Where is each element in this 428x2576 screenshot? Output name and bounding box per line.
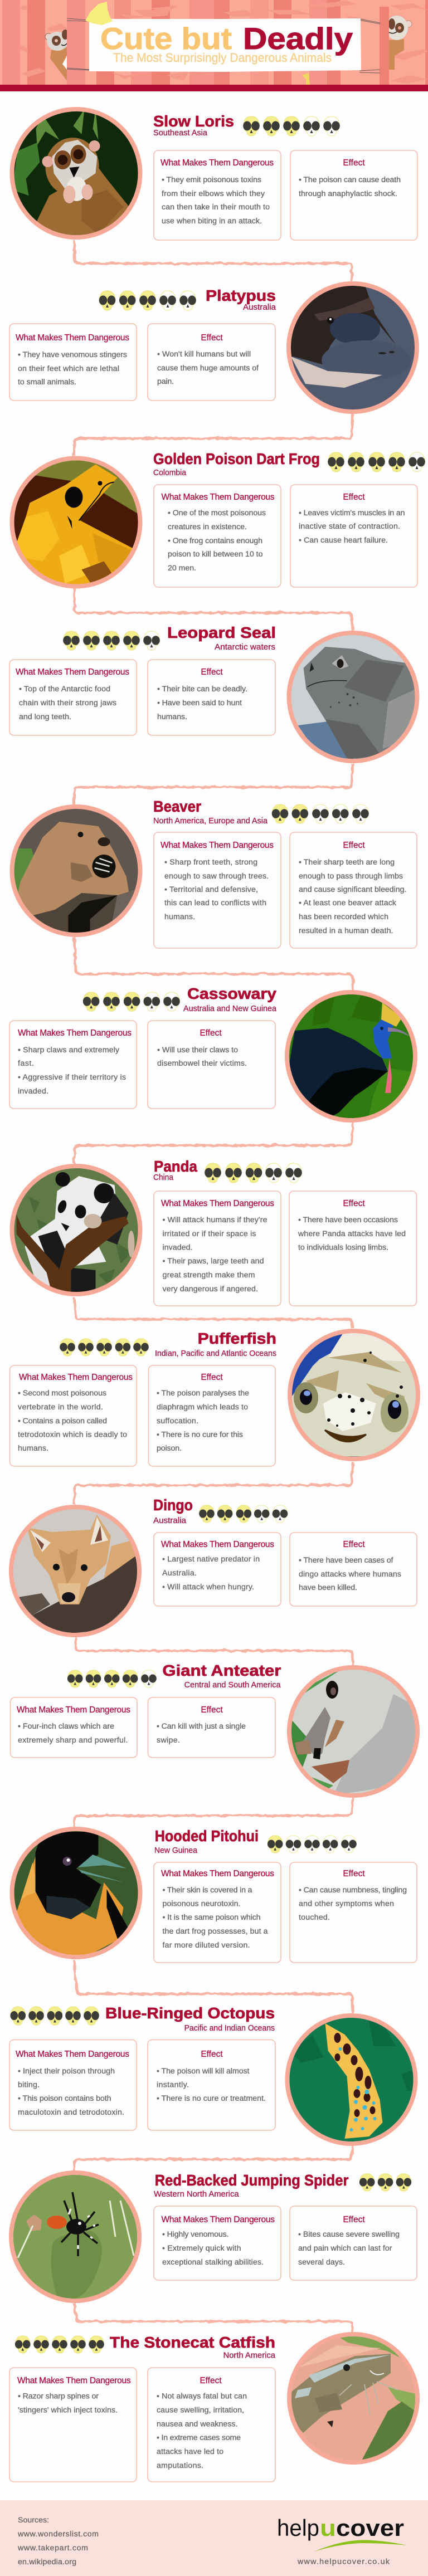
- card: what makes them dangerous: can then take in their mouth to: [162, 203, 270, 212]
- card: effect: has been recorded which: [299, 913, 388, 921]
- panel: golden poison dart frog: [9, 450, 425, 589]
- card: what makes them dangerous: What Makes Them Dangerous: [16, 333, 129, 343]
- card: effect: • Leaves victim's muscles in an: [299, 509, 405, 518]
- card: what makes them dangerous: • Extremely quick with: [162, 2244, 241, 2253]
- card: what makes them dangerous: • Second most poisonous: [18, 1389, 106, 1398]
- heading: Golden Poison Dart Frog: [153, 450, 320, 467]
- connector: seal to beaver: [74, 763, 353, 804]
- card: what makes them dangerous: What Makes Them Dangerous: [161, 1869, 274, 1879]
- danger rating: 3 of 5 skulls: [99, 291, 196, 310]
- card: what makes them dangerous: • Highly venomous.: [162, 2230, 228, 2239]
- card: what makes them dangerous: • Sharp front teeth, strong: [164, 858, 257, 867]
- card: what makes them dangerous: [9, 2368, 137, 2482]
- illustration: dingo: [8, 1504, 142, 1638]
- card: what makes them dangerous: [9, 660, 137, 735]
- card: what makes them dangerous: • Razor sharp spines or: [18, 2392, 99, 2401]
- location: Western North America: [154, 2190, 240, 2199]
- illustration: leopard seal: [286, 630, 420, 764]
- card: what makes them dangerous: this can lead to conflicts with: [164, 899, 266, 908]
- illustration: giant anteater: [286, 1665, 421, 1798]
- connector: panda to pufferfish: [74, 1297, 353, 1329]
- card: what makes them dangerous: • Inject their poison through: [18, 2067, 115, 2076]
- location: Australia: [153, 1516, 187, 1525]
- connector: loris to platypus: [74, 240, 352, 281]
- card: what makes them dangerous: [154, 832, 281, 948]
- card: effect: Effect: [200, 2376, 222, 2385]
- connector: cassowary to panda: [74, 1123, 353, 1164]
- card: what makes them dangerous: very dangerous if angered.: [163, 1285, 258, 1294]
- card: effect: [290, 485, 417, 587]
- card: effect: cause swelling, irritation,: [157, 2406, 244, 2414]
- sources: Sources:: [18, 2516, 49, 2525]
- card: effect: cause them huge amounts of: [157, 364, 259, 373]
- danger rating: 3 of 5 skulls: [83, 992, 180, 1011]
- card: what makes them dangerous: What Makes Them Dangerous: [16, 2050, 129, 2059]
- card: what makes them dangerous: • They emit poisonous toxins: [162, 175, 261, 184]
- location: China: [153, 1173, 174, 1182]
- card: effect: and cause significant bleeding.: [299, 885, 407, 894]
- card: effect: instantly.: [157, 2080, 189, 2089]
- card: effect: Effect: [343, 158, 365, 168]
- card: what makes them dangerous: [9, 1021, 137, 1109]
- card: what makes them dangerous: • Their paws, large teeth and: [163, 1257, 264, 1266]
- card: effect: Effect: [201, 667, 223, 677]
- card: what makes them dangerous: from their elbows which they: [162, 189, 265, 198]
- connector: octopus to spider: [74, 2146, 353, 2170]
- card: what makes them dangerous: What Makes Them Dangerous: [162, 492, 275, 502]
- card: what makes them dangerous: What Makes Them Dangerous: [161, 1199, 274, 1208]
- card: what makes them dangerous: What Makes Them Dangerous: [16, 667, 129, 677]
- header: forest banner: [0, 0, 428, 85]
- location: Central and South America: [184, 1681, 281, 1690]
- icon: ropes: [67, 18, 380, 73]
- card: effect: • Their sharp teeth are long: [299, 858, 395, 867]
- location: Antarctic waters: [215, 643, 275, 652]
- illustration: golden poison dart frog: [9, 456, 143, 589]
- panel: beaver: [9, 798, 417, 948]
- panel: dingo: [8, 1496, 417, 1638]
- card: effect: Effect: [343, 1869, 365, 1879]
- heading: Platypus: [206, 287, 276, 304]
- card: effect: [290, 1862, 417, 1963]
- connector: frog to seal: [74, 589, 353, 631]
- danger rating: 5 of 5 skulls: [60, 1339, 149, 1356]
- card: what makes them dangerous: exceptional stalking abilities.: [162, 2258, 264, 2267]
- panel: blue-ringed octopus: [9, 2004, 418, 2146]
- panel: stonecat catfish: [9, 2331, 420, 2482]
- danger rating: 3 of 5 skulls: [205, 1163, 302, 1183]
- header divider bar: [0, 85, 428, 91]
- connector: anteater to pitohui: [74, 1798, 353, 1827]
- card: effect: [148, 1365, 275, 1466]
- card: effect: • There is no cure for this: [157, 1431, 243, 1440]
- heading: Dingo: [153, 1496, 193, 1514]
- logo: helpucover: cover: [336, 2515, 404, 2541]
- card: what makes them dangerous: creatures in existence.: [168, 523, 247, 531]
- card: what makes them dangerous: great strength make them: [163, 1271, 255, 1280]
- card: effect: • There have been occasions: [298, 1216, 398, 1224]
- card: effect: [148, 660, 275, 735]
- location: New Guinea: [154, 1846, 198, 1855]
- card: effect: [148, 324, 275, 401]
- card: effect: inactive state of contraction.: [299, 522, 400, 531]
- card: what makes them dangerous: What Makes Them Dangerous: [162, 2215, 275, 2224]
- illustration: cassowary: [284, 989, 418, 1123]
- card: effect: • Have been said to hunt: [157, 699, 242, 708]
- card: what makes them dangerous: • Contains a poison called: [18, 1417, 107, 1426]
- card: what makes them dangerous: on their feet which are lethal: [18, 364, 119, 373]
- card: what makes them dangerous: and long teeth.: [19, 713, 71, 721]
- card: effect: humans.: [157, 713, 187, 721]
- panel: platypus: [9, 281, 420, 414]
- connector: pitohui to octopus: [74, 1960, 353, 2013]
- card: what makes them dangerous: poison to kill between 10 to: [168, 550, 263, 559]
- card: effect: pain.: [157, 377, 174, 386]
- card: effect: Effect: [343, 1199, 365, 1208]
- card: effect: [148, 2368, 275, 2482]
- card: what makes them dangerous: [154, 485, 281, 587]
- danger rating: 2 of 5 skulls: [272, 804, 369, 823]
- heading: Blue-Ringed Octopus: [105, 2004, 275, 2022]
- card: what makes them dangerous: enough to saw through trees.: [164, 872, 269, 881]
- panel: red-backed jumping spider: [8, 2170, 417, 2304]
- card: effect: • Bites cause severe swelling: [298, 2230, 400, 2239]
- card: what makes them dangerous: What Makes Them Dangerous: [17, 2376, 131, 2385]
- illustration: panda: [9, 1163, 143, 1297]
- card: what makes them dangerous: use when biting in an attack.: [162, 217, 262, 226]
- icon: banner frog: [85, 2, 113, 25]
- sources: [17, 2516, 99, 2567]
- illustration: pufferfish: [287, 1328, 421, 1462]
- card: effect: • Can cause numbness, tingling: [299, 1886, 407, 1895]
- card: what makes them dangerous: poisonous neurotoxin.: [163, 1900, 241, 1909]
- location: North America: [223, 2351, 276, 2360]
- danger rating: 3 of 5 skulls: [199, 1505, 288, 1523]
- connector: pufferfish to dingo: [74, 1461, 353, 1505]
- card: what makes them dangerous: • Largest native predator in: [162, 1555, 260, 1564]
- card: effect: poison.: [157, 1444, 182, 1453]
- card: what makes them dangerous: • Their skin is covered in a: [163, 1886, 252, 1895]
- card: effect: Effect: [201, 333, 223, 343]
- danger rating: 1 of 5 skulls: [268, 1836, 357, 1853]
- heading: Pufferfish: [198, 1330, 276, 1347]
- card: what makes them dangerous: humans.: [18, 1444, 48, 1453]
- card: effect: where Panda attacks have led: [298, 1230, 406, 1238]
- card: effect: Effect: [343, 2215, 365, 2224]
- card: what makes them dangerous: invaded.: [163, 1243, 193, 1252]
- card: what makes them dangerous: Australia.: [162, 1569, 197, 1578]
- title: Cute but: [100, 21, 232, 56]
- card: effect: [148, 1697, 275, 1758]
- card: effect: and pain which can last for: [298, 2244, 392, 2253]
- card: what makes them dangerous: irritated or if their space is: [163, 1230, 256, 1238]
- illustration: slow loris: [9, 106, 143, 240]
- card: what makes them dangerous: [10, 1365, 137, 1466]
- card: what makes them dangerous: fast.: [18, 1059, 34, 1068]
- card: effect: [290, 1533, 417, 1606]
- card: what makes them dangerous: • They have venomous stingers: [18, 350, 127, 359]
- card: what makes them dangerous: [154, 1862, 281, 1963]
- danger rating: 5 of 5 skulls: [10, 2007, 99, 2025]
- illustration: red-backed jumping spider: [8, 2170, 142, 2304]
- location: North America, Europe and Asia: [153, 817, 268, 826]
- card: what makes them dangerous: 20 men.: [168, 564, 196, 573]
- logo: helpucover: u: [320, 2515, 336, 2541]
- danger rating: 3 skulls: [359, 2174, 411, 2191]
- card: effect: Effect: [201, 1373, 223, 1382]
- card: effect: enough to pass through limbs: [299, 872, 403, 881]
- card: effect: resulted in a human death.: [299, 926, 393, 935]
- danger rating: 4 of 5 skulls: [63, 631, 160, 650]
- heading: The Stonecat Catfish: [110, 2334, 275, 2351]
- card: effect: [289, 1191, 417, 1306]
- card: what makes them dangerous: • Four-inch claws which are: [18, 1722, 114, 1731]
- card: what makes them dangerous: biting.: [18, 2080, 40, 2089]
- connector: beaver to cassowary: [74, 937, 353, 990]
- card: effect: to individuals losing limbs.: [298, 1243, 388, 1252]
- location: Australia: [243, 303, 276, 312]
- card: what makes them dangerous: far more diluted version.: [163, 1941, 250, 1950]
- card: what makes them dangerous: [11, 1697, 137, 1758]
- panel: pufferfish: [10, 1328, 421, 1466]
- card: effect: • Will use their claws to: [157, 1046, 238, 1055]
- card: what makes them dangerous: • Sharp claws and extremely: [18, 1046, 120, 1055]
- card: what makes them dangerous: extremely sharp and powerful.: [18, 1736, 128, 1745]
- icon: peeking loris right: [386, 16, 412, 70]
- card: what makes them dangerous: humans.: [164, 913, 195, 921]
- card: effect: suffocation.: [157, 1417, 198, 1426]
- sources: www.takepart.com: [17, 2544, 88, 2553]
- icon: snake: [302, 73, 310, 85]
- card: effect: and other symptoms when: [299, 1900, 394, 1909]
- card: what makes them dangerous: • Will attack when hungry.: [162, 1583, 254, 1592]
- card: effect: nausea and weakness.: [157, 2420, 237, 2429]
- footer: [0, 2500, 428, 2576]
- card: what makes them dangerous: What Makes Them Dangerous: [160, 158, 274, 168]
- card: effect: dingo attacks where humans: [299, 1570, 401, 1579]
- card: effect: [290, 832, 417, 948]
- card: what makes them dangerous: • Aggressive if their territory is: [18, 1073, 126, 1082]
- card: what makes them dangerous: [154, 1191, 281, 1306]
- card: what makes them dangerous: [154, 2206, 281, 2280]
- card: what makes them dangerous: [9, 324, 137, 401]
- card: effect: through anaphylactic shock.: [299, 189, 397, 198]
- illustration: beaver: [9, 804, 143, 938]
- card: effect: • There is no cure or treatment.: [157, 2094, 266, 2103]
- website url: www.helpucover.co.uk: [297, 2558, 390, 2567]
- card: what makes them dangerous: • Will attack humans if they're: [163, 1216, 268, 1224]
- heading: Leopard Seal: [167, 624, 276, 641]
- card: what makes them dangerous: to small animals.: [18, 378, 76, 387]
- connector: spider to catfish: [74, 2303, 353, 2332]
- card: effect: [148, 2040, 275, 2130]
- heading: Red-Backed Jumping Spider: [155, 2172, 348, 2189]
- card: effect: • The poison can cause death: [299, 175, 401, 184]
- logo: helpucover: [277, 2515, 407, 2551]
- card: effect: • There have been cases of: [299, 1556, 393, 1565]
- card: effect: • At least one beaver attack: [299, 899, 397, 908]
- panel: leopard seal: [9, 624, 420, 764]
- card: what makes them dangerous: tetrodotoxin which is deadly to: [18, 1431, 127, 1440]
- card: effect: • The poison will kill almost: [157, 2067, 250, 2076]
- card: what makes them dangerous: [154, 150, 281, 240]
- card: what makes them dangerous: • Top of the Antarctic food: [19, 685, 110, 694]
- card: effect: • In extreme cases some: [157, 2433, 241, 2442]
- card: effect: • Their bite can be deadly.: [157, 685, 247, 694]
- card: what makes them dangerous: • One frog contains enough: [168, 536, 262, 545]
- danger rating: 5 of 5 skulls: [15, 2336, 104, 2353]
- card: what makes them dangerous: What Makes Them Dangerous: [17, 1705, 130, 1715]
- illustration: stonecat catfish: [286, 2331, 420, 2465]
- card: what makes them dangerous: vertebrate in the world.: [18, 1403, 103, 1412]
- card: effect: Effect: [200, 1028, 222, 1038]
- panel: slow loris: [9, 106, 417, 240]
- card: effect: have been killed.: [299, 1583, 357, 1592]
- danger rating: 3 of 5 skulls: [243, 116, 340, 136]
- subtitle: The Most Surprisingly Dangerous Animals: [113, 51, 332, 65]
- card: effect: • Not always fatal but can: [157, 2392, 247, 2401]
- illustration: platypus: [286, 281, 420, 414]
- card: what makes them dangerous: maculotoxin and tetrodotoxin.: [18, 2108, 124, 2117]
- location: Australia and New Guinea: [183, 1004, 277, 1013]
- card: effect: [290, 2206, 417, 2280]
- card: effect: swipe.: [157, 1736, 180, 1745]
- card: what makes them dangerous: • One of the most poisonous: [168, 509, 266, 518]
- card: what makes them dangerous: What Makes Them Dangerous: [19, 1373, 133, 1382]
- card: effect: Effect: [343, 841, 365, 850]
- card: what makes them dangerous: • This poison contains both: [18, 2094, 111, 2103]
- icon: peeking loris left: [45, 30, 69, 81]
- logo: helpucover: help: [277, 2515, 319, 2541]
- panel: cassowary: [9, 985, 418, 1123]
- title: Deadly: [243, 21, 353, 56]
- location: Southeast Asia: [153, 129, 208, 138]
- heading: Beaver: [153, 798, 201, 815]
- location: Pacific and Indian Oceans: [184, 2024, 275, 2033]
- card: effect: [290, 150, 417, 240]
- connector: platypus to frog: [74, 414, 353, 456]
- card: what makes them dangerous: What Makes Them Dangerous: [161, 1540, 274, 1549]
- card: what makes them dangerous: chain with their strong jaws: [19, 699, 116, 708]
- danger rating: 4 of 5 skulls: [328, 452, 425, 472]
- heading: Giant Anteater: [162, 1662, 281, 1679]
- card: what makes them dangerous: the dart frog possesses, but a: [163, 1927, 268, 1936]
- heading: Panda: [154, 1158, 197, 1175]
- card: what makes them dangerous: invaded.: [18, 1087, 48, 1096]
- card: effect: attacks have led to: [157, 2447, 223, 2456]
- card: what makes them dangerous: [9, 2040, 137, 2130]
- card: what makes them dangerous: [154, 1533, 281, 1606]
- card: what makes them dangerous: What Makes Them Dangerous: [160, 841, 274, 850]
- card: effect: Effect: [201, 1705, 223, 1715]
- card: effect: • Can cause heart failure.: [299, 536, 388, 545]
- connector: dingo to anteater: [76, 1638, 353, 1665]
- illustration: hooded pitohui: [9, 1826, 143, 1960]
- heading: Cassowary: [187, 985, 276, 1002]
- card: effect: • Won't kill humans but will: [157, 350, 251, 359]
- panel: giant anteater: [11, 1662, 421, 1798]
- danger rating: 4 of 5 skulls: [67, 1670, 157, 1687]
- banner: [89, 18, 361, 72]
- panel: hooded pitohui: [9, 1826, 417, 1963]
- card: effect: Effect: [201, 2050, 223, 2059]
- heading: Hooded Pitohui: [155, 1827, 259, 1845]
- card: effect: • The poison paralyses the: [157, 1389, 249, 1398]
- heading: Slow Loris: [153, 113, 234, 130]
- sources: en.wikipedia.org: [18, 2558, 76, 2567]
- sources: www.wonderslist.com: [17, 2530, 99, 2539]
- title: [100, 21, 353, 56]
- card: effect: diaphragm which leads to: [157, 1403, 248, 1412]
- card: effect: several days.: [298, 2258, 345, 2267]
- card: effect: touched.: [299, 1913, 330, 1922]
- card: effect: amputations.: [157, 2461, 203, 2470]
- card: what makes them dangerous: • It is the same poison which: [163, 1913, 261, 1922]
- panel: panda: [9, 1158, 417, 1306]
- card: effect: [148, 1021, 275, 1109]
- location: Indian, Pacific and Atlantic Oceans: [155, 1349, 276, 1358]
- card: what makes them dangerous: 'stingers' which inject toxins.: [18, 2406, 118, 2414]
- illustration: blue-ringed octopus: [284, 2013, 418, 2146]
- location: Colombia: [153, 469, 187, 477]
- card: effect: disembowel their victims.: [157, 1059, 247, 1068]
- card: effect: Effect: [343, 1540, 365, 1549]
- card: effect: • Can kill with just a single: [157, 1722, 246, 1731]
- card: effect: Effect: [343, 492, 365, 502]
- card: what makes them dangerous: What Makes Them Dangerous: [18, 1028, 132, 1038]
- card: what makes them dangerous: • Territorial and defensive,: [164, 885, 258, 894]
